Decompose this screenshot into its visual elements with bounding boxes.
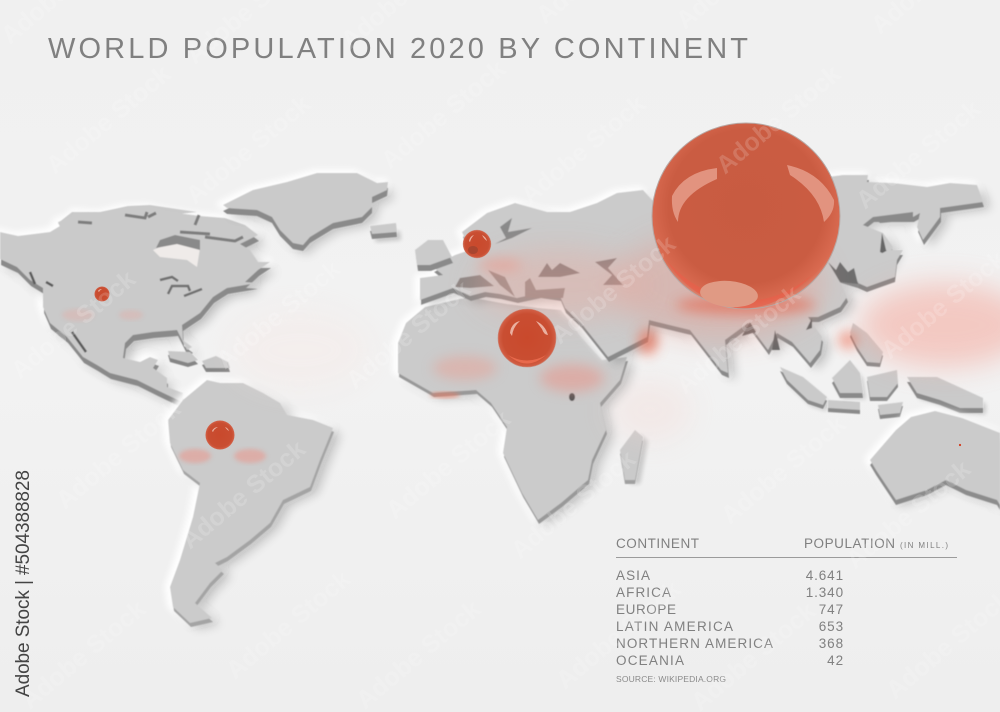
sphere: Africa xyxy=(498,309,556,367)
highlight: left xyxy=(672,168,717,222)
table row: Asia: 4.641 xyxy=(806,568,844,583)
watermarks: Adobe Stock xyxy=(841,455,976,575)
table row: Europe xyxy=(616,602,844,617)
table row: Oceania: 42 xyxy=(827,653,844,668)
table row: Africa xyxy=(616,585,844,600)
table row: Africa: AFRICA xyxy=(616,585,671,600)
watermarks: Adobe Stock xyxy=(711,60,846,180)
sphere: Latin America xyxy=(206,420,234,450)
Lake Victoria xyxy=(569,393,575,401)
watermarks: Adobe Stock xyxy=(546,230,681,350)
Siberian and Pacific inlets xyxy=(873,212,913,223)
Black Sea xyxy=(538,263,580,277)
stock id vertical label: Adobe Stock | #504388828 xyxy=(13,470,34,697)
table row: Latin America xyxy=(616,619,844,634)
sphere: Northern America xyxy=(94,286,110,302)
table row: Northern America: NORTHERN AMERICA xyxy=(616,636,773,651)
table row: Europe: EUROPE xyxy=(616,602,676,617)
watermarks: Adobe Stock xyxy=(211,255,346,375)
table row: Latin America: LATIN AMERICA xyxy=(616,619,733,634)
watermarks: Adobe Stock xyxy=(506,445,641,565)
watermarks: Adobe Stock xyxy=(551,575,686,695)
table row: Northern America: 368 xyxy=(819,636,844,651)
watermarks: Adobe Stock xyxy=(341,275,476,395)
watermarks: Adobe Stock xyxy=(221,565,356,685)
watermarks: Adobe Stock xyxy=(716,410,851,530)
table row: Oceania xyxy=(616,653,844,668)
watermarks: Adobe Stock xyxy=(351,595,486,712)
title: WORLD POPULATION 2020 BY CONTINENT xyxy=(48,33,748,65)
sphere: Europe xyxy=(463,230,491,258)
watermarks: Adobe Stock xyxy=(381,405,516,525)
table row: Africa: 1.340 xyxy=(806,585,844,600)
table header: CONTINENT xyxy=(616,536,699,551)
table header: POPULATION xyxy=(804,536,895,551)
continent: Eurasia xyxy=(415,174,991,380)
highlight: right xyxy=(787,165,834,222)
watermarks: Adobe Stock xyxy=(6,265,141,385)
watermarks: Adobe Stock xyxy=(851,95,986,215)
sphere: Asia xyxy=(652,123,840,315)
continent: Australia xyxy=(867,410,1000,512)
data table xyxy=(616,536,957,684)
contact patch xyxy=(699,279,759,309)
watermarks: Adobe Stock xyxy=(516,90,651,210)
table row: Asia: ASIA xyxy=(616,568,650,583)
Arctic islands gaps xyxy=(78,212,243,241)
Great Lakes xyxy=(160,277,202,296)
table row: Europe: 747 xyxy=(819,602,844,617)
table row: Northern America xyxy=(616,636,844,651)
map: world continents xyxy=(0,172,1000,629)
table row: Latin America: 653 xyxy=(819,619,844,634)
watermarks: Adobe Stock xyxy=(376,55,511,175)
reflected red glow xyxy=(62,230,1000,463)
Italy and Adriatic xyxy=(488,270,515,297)
continent: Greenland and Iceland xyxy=(220,172,401,254)
islands: Asia and Madagascar xyxy=(168,250,986,484)
source: SOURCE: WIKIPEDIA.ORG xyxy=(616,674,726,684)
watermarks: Adobe Stock xyxy=(41,60,176,180)
watermarks: Adobe Stock xyxy=(51,395,186,515)
watermarks: Adobe Stock xyxy=(16,595,151,712)
sphere: Oceania xyxy=(959,444,961,446)
continent: Africa xyxy=(395,296,635,526)
Hudson Bay xyxy=(153,240,200,267)
table row: Asia xyxy=(616,568,844,583)
Baltic gulfs xyxy=(495,218,532,244)
west coast inlets xyxy=(30,272,86,352)
table header: (IN MILL.) xyxy=(900,541,948,550)
Caspian Sea xyxy=(595,258,623,285)
continent: North America xyxy=(0,205,277,411)
table header xyxy=(616,536,948,551)
watermarks: Adobe Stock xyxy=(176,435,311,555)
continent: South America xyxy=(165,379,341,629)
watermarks: Adobe Stock xyxy=(671,280,806,400)
watermarks: Adobe Stock xyxy=(181,90,316,210)
table row: Oceania: OCEANIA xyxy=(616,653,684,668)
